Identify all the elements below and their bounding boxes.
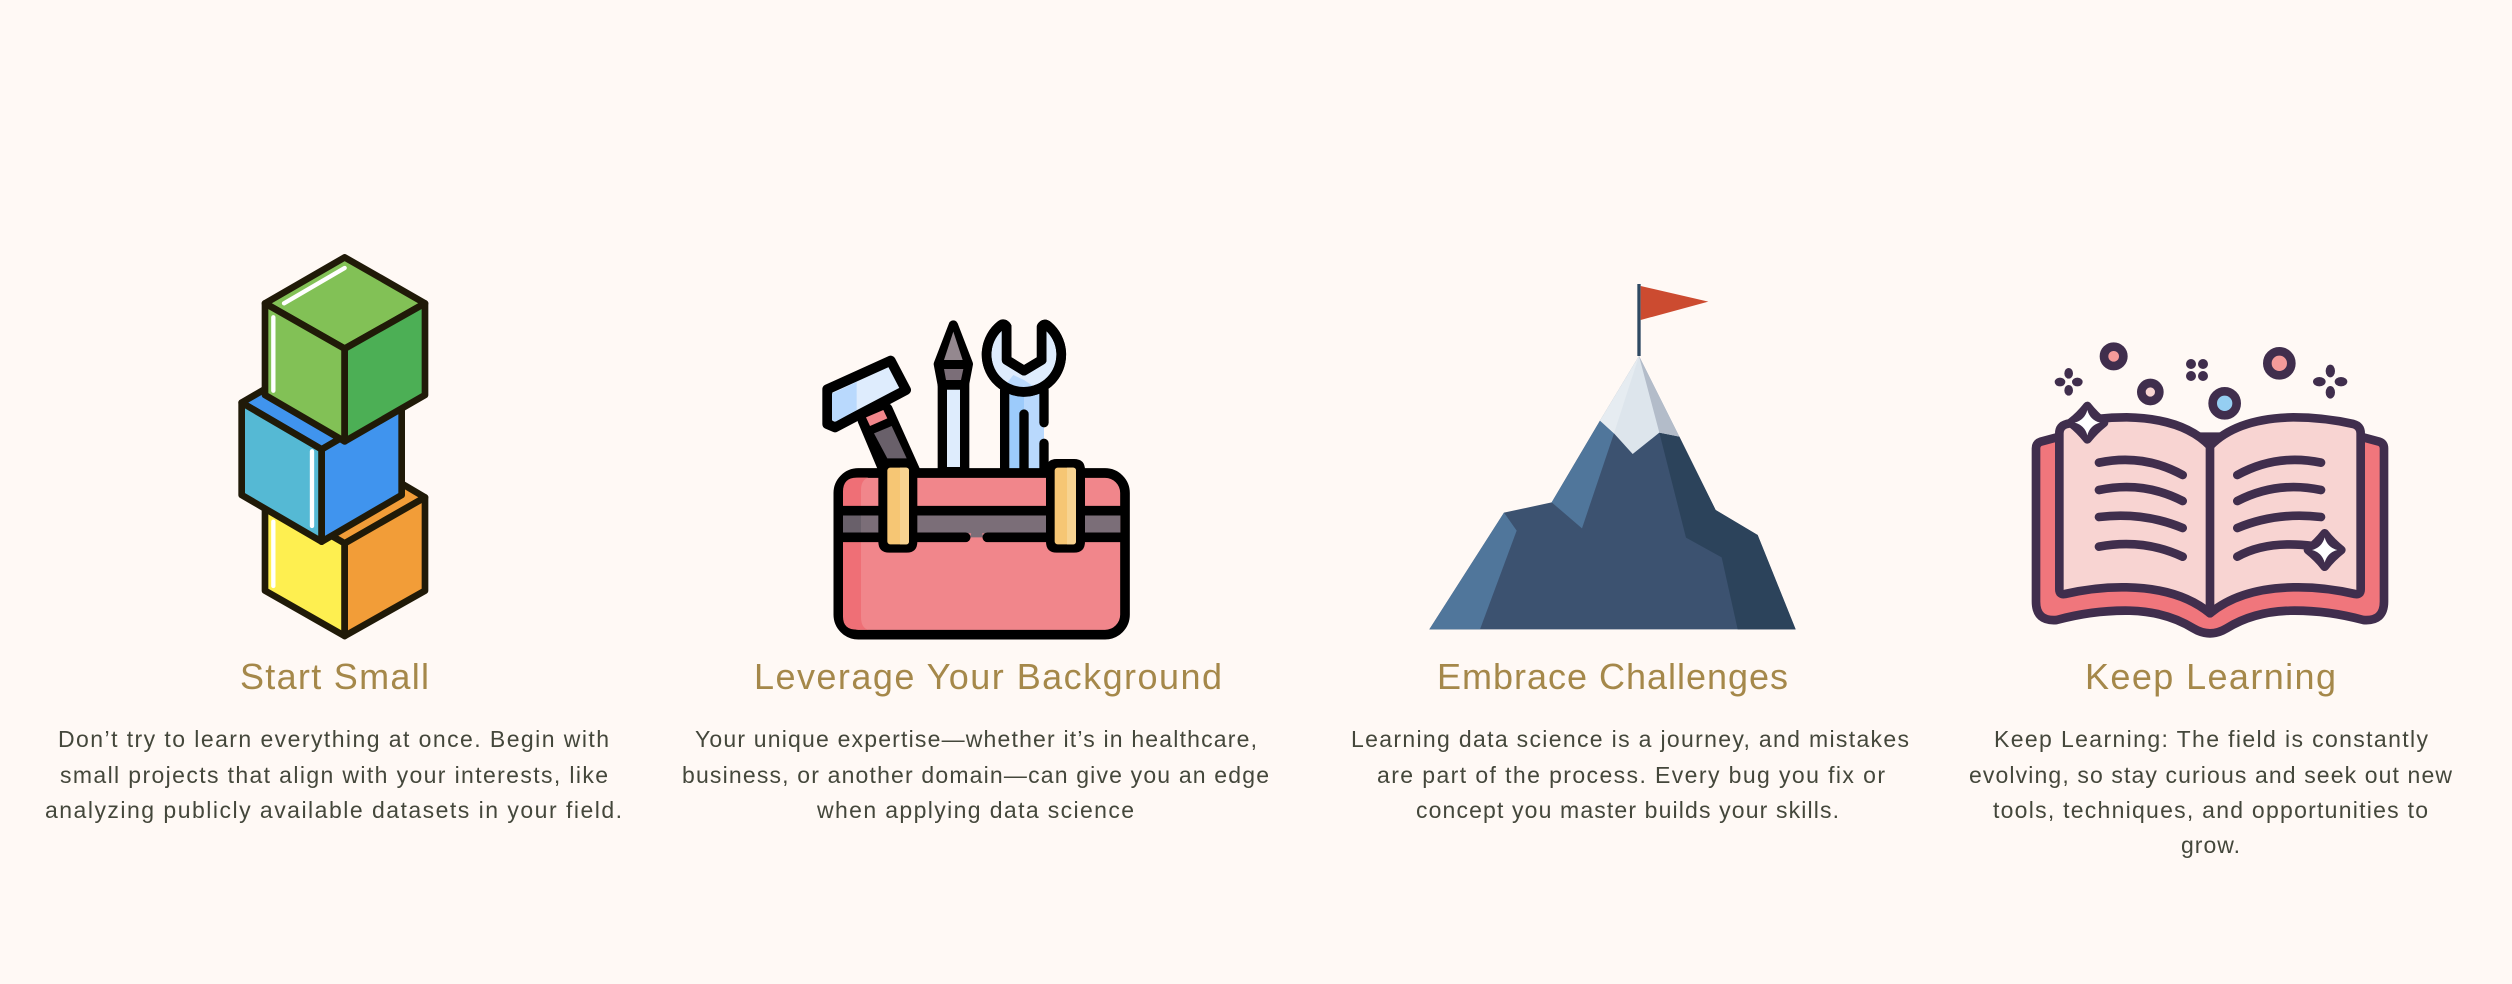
heading: start small: Start Small bbox=[240, 656, 429, 697]
text: leverage description: business, or another domain—can give you an edge bbox=[682, 762, 1269, 788]
panel: leverage your background bbox=[682, 324, 1269, 823]
text: embrace description bbox=[1351, 726, 1909, 823]
text: leverage description: when applying data science bbox=[816, 797, 1134, 823]
text: leverage description: Your unique expertise—whether it’s in healthcare, bbox=[695, 726, 1257, 752]
box body bbox=[838, 473, 1125, 635]
text: embrace description: concept you master builds your skills. bbox=[1416, 797, 1839, 823]
text: embrace description: are part of the process. Every bug you fix or bbox=[1377, 762, 1885, 788]
box band bbox=[843, 513, 1120, 533]
latch right bbox=[1046, 459, 1085, 553]
text: keep learning description: evolving, so stay curious and seek out new bbox=[1969, 762, 2452, 788]
latch left bbox=[878, 464, 917, 553]
book pages bbox=[2059, 417, 2361, 613]
floating dots bbox=[2055, 359, 2347, 399]
sparkle bottom right bbox=[2308, 533, 2341, 567]
sparkle top left bbox=[2071, 406, 2104, 439]
heading: embrace challenges: Embrace Challenges bbox=[1437, 656, 1788, 697]
hammer bbox=[827, 361, 915, 470]
icon: stacked cubes bbox=[242, 257, 425, 636]
icon: mountain with flag bbox=[1429, 284, 1796, 629]
page lines bbox=[2099, 460, 2321, 557]
screwdriver bbox=[938, 325, 968, 472]
text: leverage description bbox=[682, 726, 1269, 823]
panel: keep learning bbox=[1969, 347, 2452, 858]
heading: keep learning: Keep Learning bbox=[2085, 656, 2336, 697]
text: keep learning description: grow. bbox=[2181, 832, 2240, 858]
panel: start small bbox=[45, 257, 622, 823]
text: start small description bbox=[45, 726, 622, 823]
text: keep learning description: tools, techniques, and opportunities to bbox=[1993, 797, 2428, 823]
text: keep learning description: Keep Learning: The field is constantly bbox=[1994, 726, 2428, 752]
text: start small description: Don’t try to learn everything at once. Begin with bbox=[58, 726, 609, 752]
text: keep learning description bbox=[1969, 726, 2452, 858]
floating circles bbox=[2104, 347, 2291, 415]
wrench bbox=[987, 324, 1061, 472]
text: start small description: small projects that align with your interests, like bbox=[60, 762, 608, 788]
panel: embrace challenges bbox=[1351, 284, 1909, 823]
flag bbox=[1637, 284, 1708, 356]
heading: leverage your background: Leverage Your Background bbox=[754, 656, 1222, 697]
text: start small description: analyzing publicly available datasets in your field. bbox=[45, 797, 622, 823]
book cover bbox=[2036, 437, 2384, 633]
icon: toolbox bbox=[827, 324, 1125, 635]
text: embrace description: Learning data science is a journey, and mistakes bbox=[1351, 726, 1909, 752]
icon: open book with sparkles bbox=[2036, 347, 2384, 633]
